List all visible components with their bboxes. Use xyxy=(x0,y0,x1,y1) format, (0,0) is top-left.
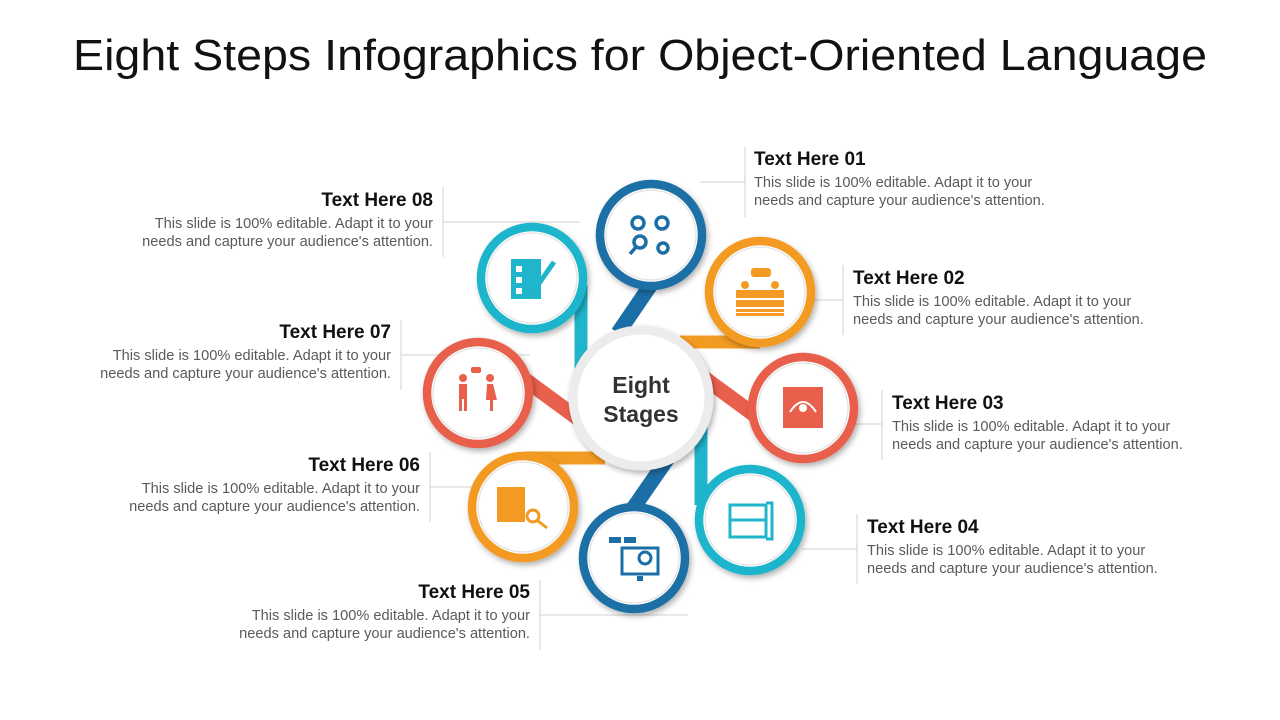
center circle: Eight xyxy=(612,372,670,398)
circle 4 xyxy=(699,469,801,571)
text 01: This slide is 100% editable. Adapt it to your xyxy=(754,175,1032,191)
text 05: This slide is 100% editable. Adapt it to your xyxy=(252,608,530,624)
text 04: Text Here 04 xyxy=(867,517,979,538)
text 06 xyxy=(129,455,420,515)
text 08: needs and capture your audience's attention. xyxy=(142,234,433,250)
text 07: needs and capture your audience's attention. xyxy=(100,366,391,382)
text 06: Text Here 06 xyxy=(308,455,420,476)
text 05: Text Here 05 xyxy=(418,582,530,603)
center circle xyxy=(573,330,709,466)
icon: document search xyxy=(497,487,547,528)
text 01 xyxy=(754,149,1045,209)
icon: blueprint xyxy=(730,503,772,539)
icon: meeting xyxy=(736,268,784,316)
text 02: Text Here 02 xyxy=(853,268,965,289)
text 05: needs and capture your audience's attention. xyxy=(239,626,530,642)
circle 7 xyxy=(427,342,529,444)
text 03: Text Here 03 xyxy=(892,393,1004,414)
text 04: needs and capture your audience's attention. xyxy=(867,561,1158,577)
icon: people talking xyxy=(459,367,497,411)
text 07: This slide is 100% editable. Adapt it to your xyxy=(113,348,391,364)
circle 2 xyxy=(709,241,811,343)
text 03: This slide is 100% editable. Adapt it to your xyxy=(892,419,1170,435)
title: Eight Steps Infographics for Object-Oriented Language xyxy=(73,31,1207,80)
text 08: Text Here 08 xyxy=(321,190,433,211)
circle 5 xyxy=(583,507,685,609)
circle 1 xyxy=(600,184,702,286)
icon: design tool xyxy=(783,387,823,428)
circle 6 xyxy=(472,456,574,558)
text 08: This slide is 100% editable. Adapt it to your xyxy=(155,216,433,232)
text 01: Text Here 01 xyxy=(754,149,866,170)
icon: clipboard xyxy=(511,259,554,299)
text 02 xyxy=(853,268,1144,328)
text 04 xyxy=(867,517,1158,577)
circle 3 xyxy=(752,357,854,459)
center circle: Stages xyxy=(603,401,679,427)
leader lines xyxy=(401,147,882,650)
icon: monitor gears xyxy=(609,537,658,581)
text 02: needs and capture your audience's attention. xyxy=(853,312,1144,328)
circle 8 xyxy=(481,227,583,329)
text 03 xyxy=(892,393,1183,453)
text 05 xyxy=(239,582,530,642)
connector bands xyxy=(505,283,775,520)
text 02: This slide is 100% editable. Adapt it to your xyxy=(853,294,1131,310)
text 06: This slide is 100% editable. Adapt it to your xyxy=(142,481,420,497)
text 03: needs and capture your audience's attention. xyxy=(892,437,1183,453)
text 07: Text Here 07 xyxy=(279,322,391,343)
icon: gears xyxy=(630,217,668,254)
text 01: needs and capture your audience's attention. xyxy=(754,193,1045,209)
text 04: This slide is 100% editable. Adapt it to your xyxy=(867,543,1145,559)
text 06: needs and capture your audience's attention. xyxy=(129,499,420,515)
text 08 xyxy=(142,190,433,250)
text 07 xyxy=(100,322,391,382)
